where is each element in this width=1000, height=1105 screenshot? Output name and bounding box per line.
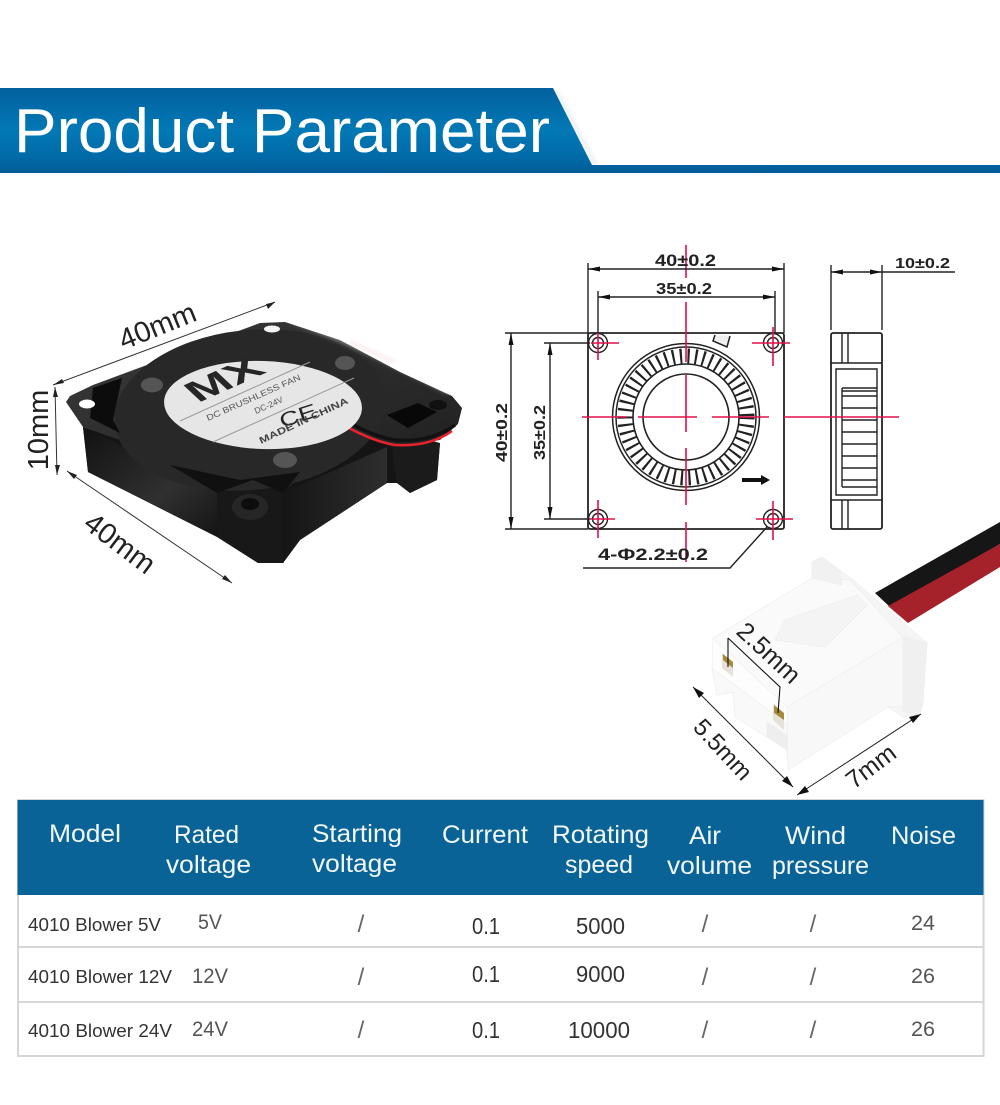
table header: Starting [312, 820, 402, 848]
row: 4010 Blower 5V: / [810, 911, 817, 938]
row: 4010 Blower 24V: 26 [911, 1018, 935, 1041]
dimension: 40mm lower [67, 471, 232, 583]
fan label: MADE IN CHINA [258, 396, 350, 447]
row: 4010 Blower 12V: 4010 Blower 12V [28, 967, 172, 987]
pins [722, 653, 784, 730]
row: 4010 Blower 24V: 24V [192, 1018, 228, 1041]
row: 4010 Blower 24V: / [810, 1017, 817, 1044]
dimension: 7mm [797, 714, 921, 795]
row: 4010 Blower 12V: 0.1 [472, 961, 500, 987]
row: 4010 Blower 12V: / [358, 964, 365, 991]
row: 4010 Blower 12V: / [810, 964, 817, 991]
row: 4010 Blower 5V: 5V [198, 911, 222, 934]
table header [18, 800, 984, 895]
dimension: 40±0.2 left: 40±0.2 [494, 403, 511, 462]
row: 4010 Blower 5V: / [702, 911, 709, 938]
table header: speed [565, 851, 633, 879]
fan body [66, 314, 462, 563]
row: 4010 Blower 24V [28, 1017, 935, 1044]
fan label: DC-24V [253, 394, 285, 416]
dimension: 35±0.2 top: 35±0.2 [656, 281, 712, 298]
dimension: 10±0.2 [831, 255, 955, 330]
callout: hole diameter [583, 527, 767, 568]
red centre lines [582, 245, 793, 562]
table header: Air [689, 822, 721, 850]
photo: blower fan with dimensions [23, 297, 462, 583]
mounting holes [588, 334, 782, 528]
side details [831, 333, 882, 529]
row: 4010 Blower 24V: 10000 [568, 1017, 630, 1043]
row: 4010 Blower 5V: 4010 Blower 5V [28, 915, 161, 935]
dimension: 5.5mm: 5.5mm [688, 714, 757, 786]
table header: Model [49, 820, 121, 848]
table frame [18, 800, 984, 1056]
table header: Rotating [552, 821, 649, 849]
row: 4010 Blower 24V: 0.1 [472, 1017, 500, 1043]
fan label: DC BRUSHLESS FAN [205, 372, 302, 423]
dimension: 5.5mm [688, 687, 793, 787]
photo: connector with wires [688, 522, 1000, 795]
connector housing [712, 557, 927, 770]
row: 4010 Blower 24V: 4010 Blower 24V [28, 1021, 172, 1041]
dimension: 10±0.2: 10±0.2 [895, 255, 950, 272]
fan label: CE [277, 400, 320, 433]
dimension: 40mm top [53, 297, 275, 385]
side outline [831, 333, 882, 529]
row: 4010 Blower 5V: / [358, 911, 365, 938]
row: 4010 Blower 24V: / [702, 1017, 709, 1044]
technical drawing: side view [784, 255, 955, 529]
title banner [0, 88, 1000, 173]
tab and airflow arrow [713, 335, 770, 485]
table header: Noise [891, 822, 956, 850]
fan label: MX [176, 352, 274, 409]
row: 4010 Blower 5V [28, 911, 935, 939]
heading: Product Parameter: Product Parameter [14, 97, 550, 166]
table header: volume [667, 852, 752, 880]
dimension: 2.5mm: 2.5mm [731, 617, 806, 689]
table header: Current [442, 821, 528, 849]
dimension: 35±0.2 top [598, 281, 775, 333]
impeller [612, 344, 760, 490]
dimension: 35±0.2 left: 35±0.2 [532, 405, 549, 460]
dimension: 35±0.2 left [532, 343, 590, 519]
technical drawing: front view [494, 245, 793, 568]
fan label [163, 352, 363, 452]
dimension: 40±0.2 top [588, 251, 784, 333]
callout: hole diameter: 4-Φ2.2±0.2 [598, 545, 708, 564]
row: 4010 Blower 12V [28, 961, 935, 991]
table header: pressure [772, 852, 869, 880]
row: 4010 Blower 12V: 9000 [576, 961, 625, 987]
red centre line [784, 416, 899, 418]
dimension: 10mm: 10mm [23, 390, 55, 470]
row: 4010 Blower 12V: 12V [192, 965, 228, 988]
dimension: 40±0.2 top: 40±0.2 [655, 251, 716, 270]
dimension: 40±0.2 left [494, 333, 588, 529]
housing outline [588, 333, 784, 529]
row: 4010 Blower 12V: / [702, 964, 709, 991]
table header: Rated [174, 821, 239, 849]
table header: Wind [785, 822, 846, 850]
row: 4010 Blower 5V: 5000 [576, 913, 625, 939]
table header: voltage [312, 850, 397, 878]
wires [875, 522, 1000, 623]
row: 4010 Blower 5V: 0.1 [472, 913, 500, 939]
dimension: 7mm: 7mm [841, 739, 902, 795]
table header: voltage [166, 851, 251, 879]
table: blower parameters [18, 800, 984, 1056]
row: 4010 Blower 24V: / [358, 1017, 365, 1044]
row: 4010 Blower 12V: 26 [911, 965, 935, 988]
dimension: 40mm top: 40mm [114, 297, 201, 357]
row: 4010 Blower 5V: 24 [911, 912, 935, 935]
dimension: 40mm lower: 40mm [78, 507, 161, 581]
